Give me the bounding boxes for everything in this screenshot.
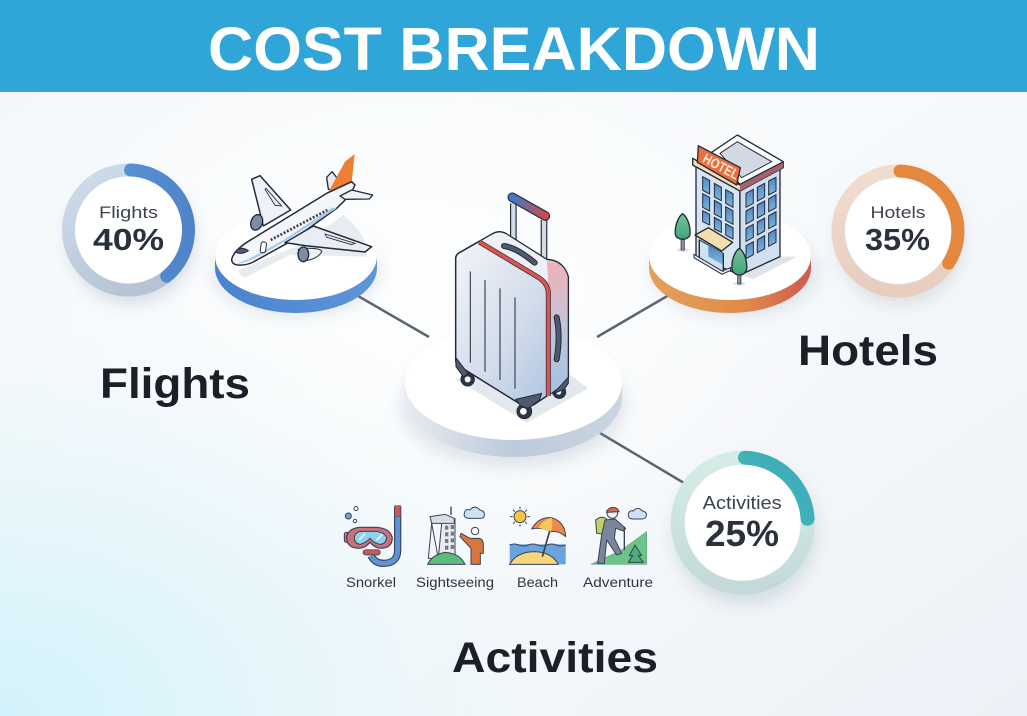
icon: airplane [232,154,373,277]
panel: activity icons [344,506,653,590]
panel: hotels donut [836,169,964,305]
panel: flights donut [66,168,195,304]
hotels percent: 35% [865,222,930,257]
activities percent: 25% [705,513,779,554]
panel: activities donut [673,455,817,605]
icon: snorkel [344,506,401,563]
label: adventure: Adventure [583,575,653,590]
header banner [0,0,1027,92]
flights percent: 40% [93,222,164,257]
panel: flights platform [212,154,380,318]
icon: trees [675,214,747,286]
heading: flights: Flights [100,360,250,408]
icon: hotel building [675,135,797,286]
icon: sightseeing [428,507,484,564]
hotels donut label: Hotels [870,203,926,222]
suitcase wheels [461,373,566,419]
icon: beach [510,507,566,564]
label: beach: Beach [517,575,558,590]
heading: activities: Activities [452,634,658,682]
activities donut label: Activities [703,493,782,513]
connector: hotels to luggage [597,295,669,337]
hotel windows [703,177,776,259]
connector: luggage to activities [600,433,684,483]
connector: flights to luggage [358,296,429,337]
label: snorkel: Snorkel [346,575,396,590]
hotel sign text: HOTEL [700,150,742,183]
flights donut label: Flights [99,203,158,222]
panel: hotels platform [649,135,819,318]
icon: adventure [591,507,647,564]
panel: luggage platform [401,197,625,467]
title: COST BREAKDOWN [208,15,820,83]
hotel entrance [699,240,723,272]
heading: hotels: Hotels [798,327,938,375]
icon: suitcase [455,197,588,423]
label: sightseeing: Sightseeing [416,575,494,590]
